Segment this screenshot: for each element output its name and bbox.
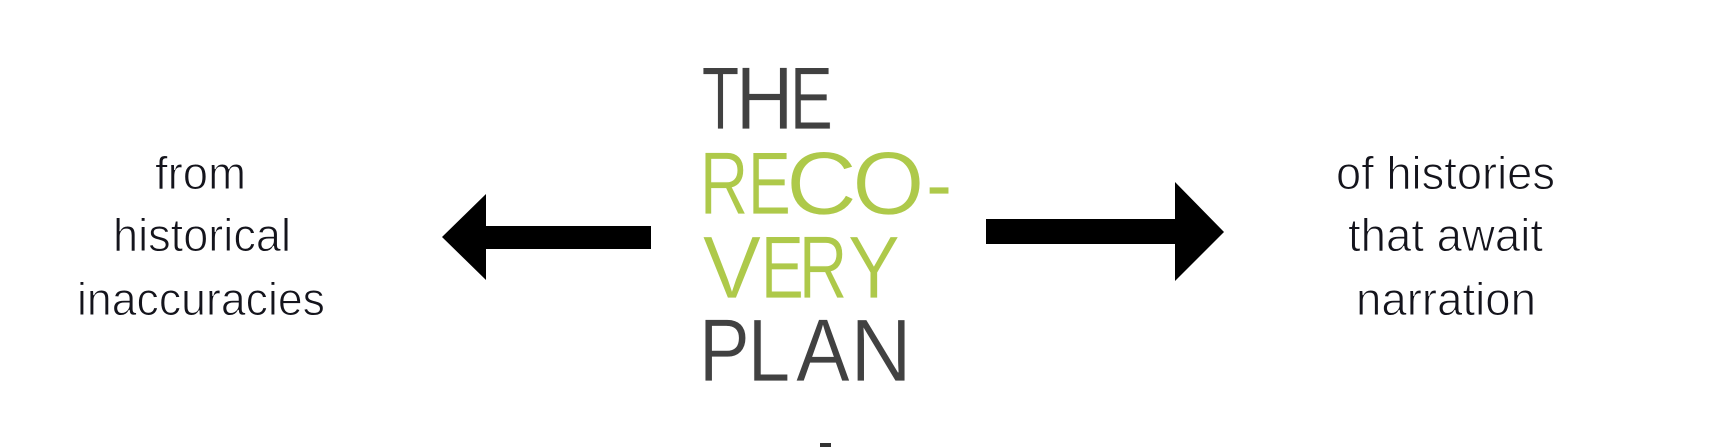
title: The Recovery Plan: R [799,217,848,317]
title: The Recovery Plan: O [852,133,924,233]
title: The Recovery Plan: N [850,300,912,400]
title: The Recovery Plan: Y [848,217,900,317]
cropped mark at bottom edge [820,443,831,447]
title: The Recovery Plan: C [786,133,857,233]
title: The Recovery Plan: A [796,300,850,400]
title: The Recovery Plan [699,48,952,400]
title: The Recovery Plan: H [736,48,794,148]
title: The Recovery Plan: - [926,133,952,233]
text block: from historical inaccuracies: from [155,147,246,199]
arrow: pointing left [442,194,651,280]
title: The Recovery Plan: E [790,48,833,148]
title: The Recovery Plan: V [703,217,761,317]
text block: of histories that await narration: of histories [1336,147,1555,199]
text block: of histories that await narration [1336,147,1555,325]
arrow: pointing right [986,182,1224,281]
title: The Recovery Plan: R [700,133,748,233]
title: The Recovery Plan: T [702,48,739,148]
text block: of histories that await narration: narration [1356,273,1536,325]
text block: from historical inaccuracies: inaccuracies [77,273,325,325]
title: The Recovery Plan: P [699,300,750,400]
title: The Recovery Plan: L [748,300,790,400]
text block: from historical inaccuracies: historical [113,209,291,261]
text block: of histories that await narration: that await [1348,209,1543,261]
title: The Recovery Plan: E [748,133,791,233]
title: The Recovery Plan: E [761,217,804,317]
text block: from historical inaccuracies [77,147,325,325]
